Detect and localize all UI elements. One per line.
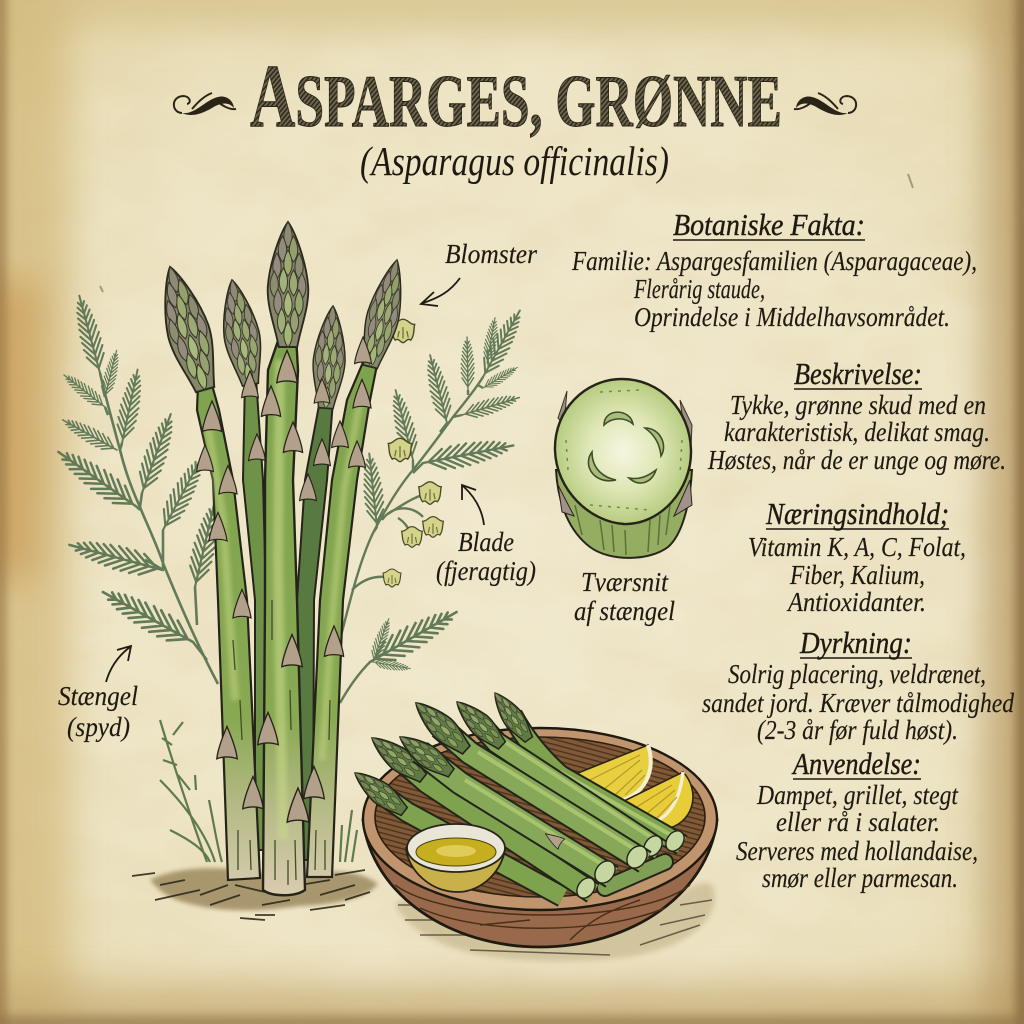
text block: Anvendelse: smør eller parmesan.	[762, 863, 958, 893]
text block: Botaniske Fakta: Flerårig staude,	[633, 274, 765, 304]
text block: Botaniske Fakta	[571, 207, 977, 332]
label: Tværsnit af stængel: af stængel	[574, 596, 675, 626]
lemon wedge 1	[573, 745, 651, 802]
label: Tværsnit af stængel	[574, 567, 675, 626]
bowl shadow	[395, 883, 715, 961]
subtitle: (Asparagus officinalis)	[360, 138, 669, 184]
left fern	[52, 293, 224, 684]
text block: Næringsindhold: Vitamin K, A, C, Folat,	[748, 532, 966, 562]
asparagus spears bunch	[150, 222, 412, 895]
lemon wedge 2	[620, 772, 693, 828]
label: Blade	[436, 527, 536, 586]
spear F	[348, 764, 563, 897]
text block: Dyrkning	[702, 625, 1014, 745]
cross section of stem	[555, 379, 692, 558]
label: Blomster: Blomster	[445, 239, 537, 269]
arrow to flowers	[421, 278, 460, 306]
text block: Anvendelse: Serveres med hollandaise,	[736, 836, 978, 866]
spear D	[394, 728, 619, 887]
text block: Næringsindhold: Næringsindhold;	[765, 496, 949, 531]
label: Blade: (fjeragtig)	[436, 556, 536, 586]
text block: Beskrivelse: Beskrivelse:	[794, 356, 922, 391]
label: Stængel: (spyd)	[67, 712, 130, 742]
text block: Botaniske Fakta: Botaniske Fakta:	[673, 207, 865, 242]
text block: Beskrivelse: Tykke, grønne skud med en	[730, 390, 986, 420]
arrow to leaves	[462, 485, 484, 525]
bowl interior	[375, 737, 705, 897]
text block: Næringsindhold: Antioxidanter.	[786, 587, 926, 617]
bowl of asparagus	[348, 687, 717, 961]
text block: Næringsindhold	[748, 496, 966, 617]
label: Stængel	[58, 681, 138, 742]
spear 1	[150, 261, 263, 880]
text block: Anvendelse: eller rå i salater.	[776, 807, 940, 837]
spear 5	[304, 256, 412, 877]
text block: Botaniske Fakta: Oprindelse i Middelhavsområdet.	[634, 302, 950, 332]
arrow to stem	[106, 646, 131, 682]
bowl body	[363, 820, 717, 947]
text block: Anvendelse	[736, 746, 978, 893]
text block: Anvendelse: Dampet, grillet, stegt	[756, 780, 959, 810]
spear B	[449, 694, 666, 860]
under stems	[605, 862, 665, 888]
spear 3 centre	[258, 222, 309, 895]
spear 4 back	[297, 305, 349, 860]
flourish left	[174, 93, 236, 115]
flourish right	[794, 93, 856, 115]
spear 2 back	[215, 277, 268, 850]
text block: Dyrkning: Dyrkning:	[799, 625, 912, 660]
title: ASPARGES, GRØNNE	[250, 47, 782, 146]
bowl rim	[363, 728, 717, 910]
text block: Beskrivelse: karakteristisk, delikat smag.	[724, 417, 990, 447]
text block: Beskrivelse	[707, 356, 1006, 475]
small plant and soil	[132, 720, 378, 920]
label: Blade: Blade	[458, 527, 514, 557]
label: Stængel: Stængel	[58, 681, 138, 711]
right fern with flowers	[340, 306, 528, 703]
text block: Dyrkning: Solrig placering, veldrænet,	[728, 659, 986, 689]
spear E	[365, 729, 599, 902]
text block: Dyrkning: (2-3 år før fuld høst).	[757, 715, 958, 745]
text block: Næringsindhold: Fiber, Kalium,	[789, 560, 925, 590]
spear C	[408, 694, 651, 872]
label: Tværsnit af stængel: Tværsnit	[581, 567, 669, 597]
text block: Anvendelse: Anvendelse:	[791, 746, 921, 781]
vascular bundles	[588, 412, 664, 483]
dipping dish with oil	[406, 824, 505, 892]
spear A	[487, 687, 688, 855]
